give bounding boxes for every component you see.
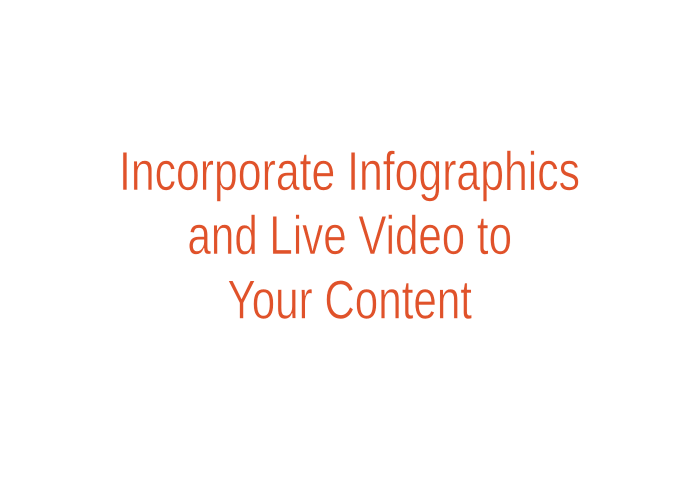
- title line 3: Your Content: [228, 268, 472, 330]
- title line 2: and Live Video to: [188, 204, 512, 266]
